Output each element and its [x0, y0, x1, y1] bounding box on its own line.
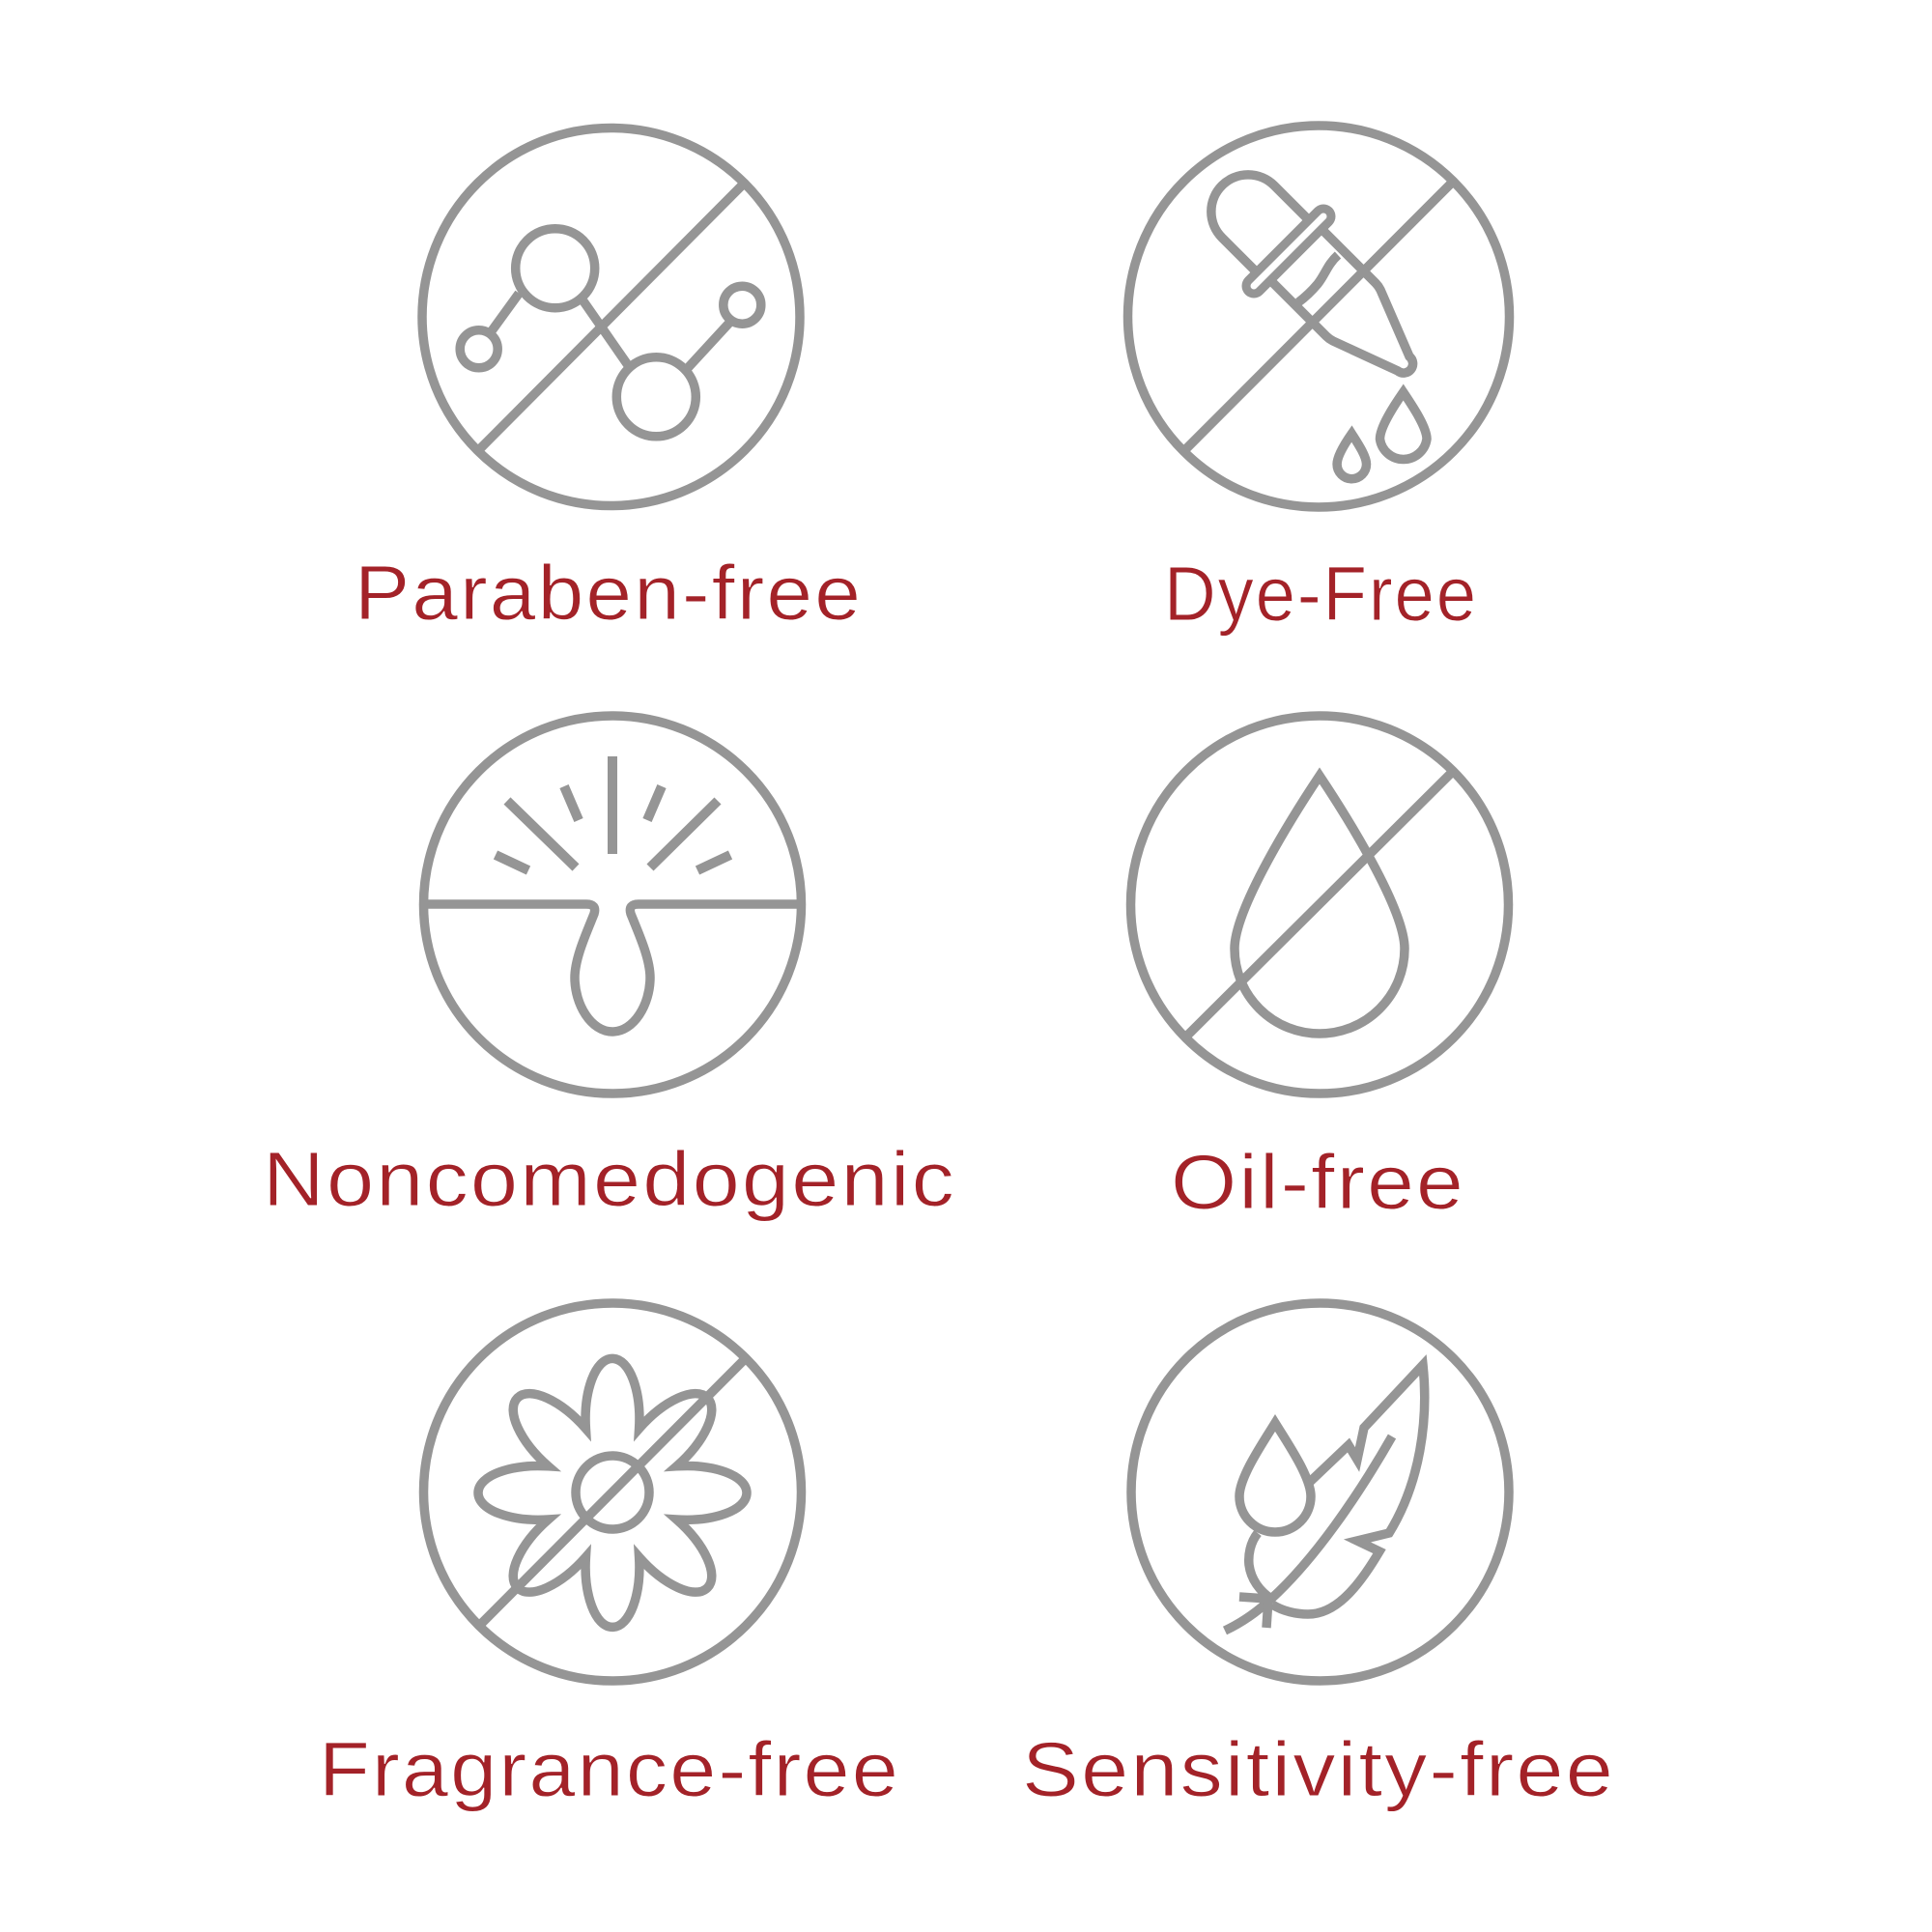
panel: noncomedogenic	[263, 716, 956, 1222]
label: Dye-Free: Dye-Free	[1164, 551, 1478, 637]
panel: fragrance-free	[319, 1303, 900, 1812]
panel: dye-free	[1128, 126, 1509, 637]
label: Noncomedogenic: Noncomedogenic	[263, 1136, 956, 1222]
panel: paraben-free	[355, 128, 863, 636]
label: Oil-free: Oil-free	[1171, 1139, 1465, 1225]
icon: oil drop with slash	[1130, 716, 1509, 1094]
icon: feather and drop	[1131, 1303, 1509, 1681]
icon: molecule with slash	[422, 128, 800, 506]
icon: pore with rays	[423, 716, 802, 1094]
label: Paraben-free: Paraben-free	[355, 550, 863, 636]
panel: oil-free	[1130, 716, 1509, 1225]
icon: dropper with slash	[1128, 126, 1509, 507]
label: Fragrance-free: Fragrance-free	[319, 1726, 900, 1812]
label: Sensitivity-free: Sensitivity-free	[1022, 1726, 1615, 1812]
icon: flower with slash	[423, 1303, 802, 1681]
panel: sensitivity-free	[1022, 1303, 1615, 1812]
